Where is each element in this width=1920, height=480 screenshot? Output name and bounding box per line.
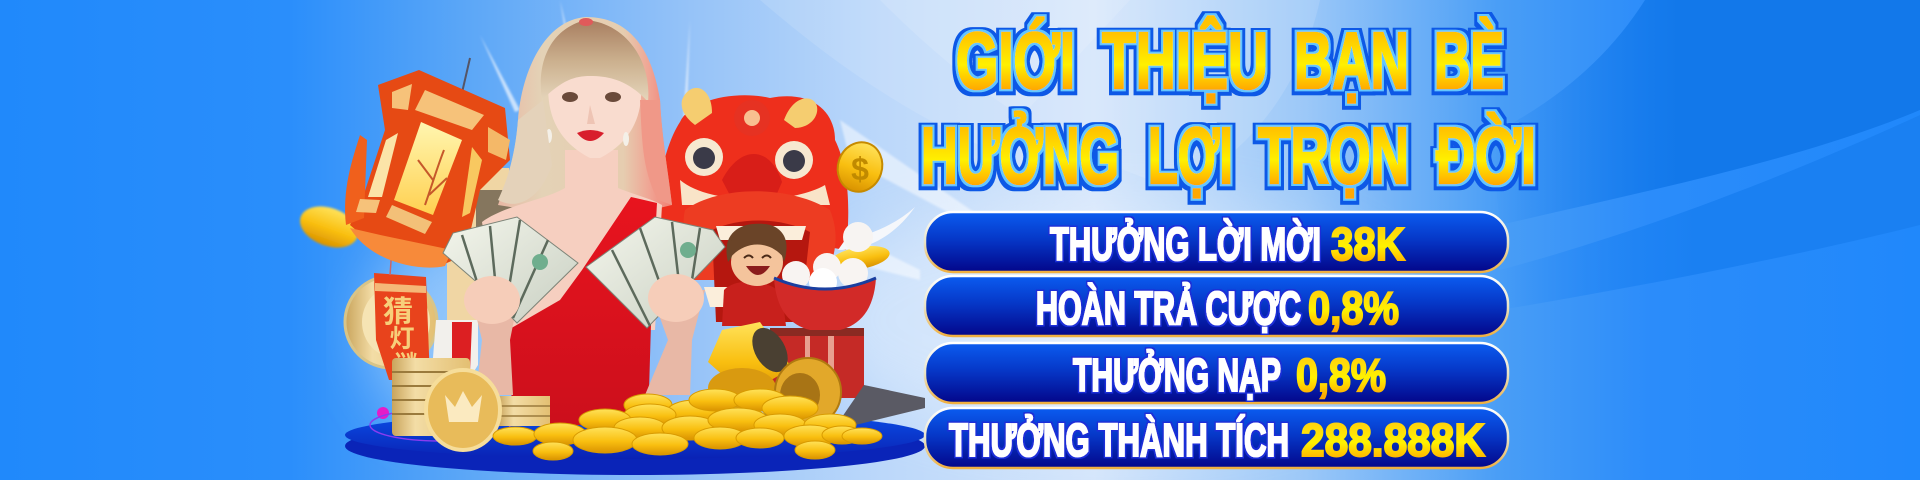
title line 2	[921, 111, 1536, 200]
lion horns	[682, 88, 712, 125]
coin with dollar sign	[831, 136, 889, 198]
eyes, nose and lips	[562, 92, 578, 102]
bar: bet rebate: HOÀN TRẢ CƯỢC	[1036, 282, 1301, 334]
bar: invite reward	[925, 212, 1508, 272]
spoon with rice ball	[829, 207, 915, 274]
lion dance head	[659, 88, 848, 322]
title line 1	[956, 16, 1504, 105]
title line 2: TRỌN	[1258, 111, 1409, 200]
gold coin stacks and crown coin	[392, 358, 550, 450]
bar: bet rebate	[925, 276, 1508, 336]
red dress	[508, 197, 657, 425]
golden pot spilling coins	[708, 322, 841, 426]
title line 1: BẠN	[1294, 16, 1409, 105]
hands	[464, 276, 520, 324]
title line 2: LỢI	[1148, 111, 1233, 200]
pile of gold coins	[493, 389, 882, 460]
paper lantern	[345, 58, 510, 268]
title line 2: ĐỜI	[1436, 111, 1536, 200]
red drum	[770, 328, 864, 398]
title line 1: THIỆU	[1102, 16, 1268, 105]
bar: invite reward: THƯỞNG LỜI MỜI	[1050, 218, 1321, 270]
bar: achievement reward: THƯỞNG THÀNH TÍCH	[949, 414, 1289, 466]
title line 1: GIỚI	[956, 16, 1075, 105]
big coin with red banner: 灯	[389, 319, 415, 355]
money fans	[443, 217, 725, 328]
face	[548, 64, 641, 158]
laughing boy	[722, 224, 787, 326]
laptop	[835, 385, 925, 430]
hair back	[498, 17, 672, 215]
arms	[470, 290, 520, 395]
bar: bet rebate: 0,8%	[1308, 282, 1399, 334]
bar: deposit reward: 0,8%	[1296, 349, 1386, 401]
illustration: festive promo scene	[294, 17, 925, 475]
bar: deposit reward: THƯỞNG NẠP	[1073, 349, 1281, 401]
blue round platform	[345, 407, 925, 475]
big coin with red banner: 猜	[383, 287, 413, 331]
title line 1: BÈ	[1434, 16, 1504, 105]
flying gold coin left	[294, 199, 364, 255]
big coin with red banner	[345, 248, 437, 380]
neck and shoulders	[482, 150, 662, 330]
bar: invite reward: 38K	[1331, 218, 1405, 270]
title line 2: HƯỞNG	[921, 111, 1119, 200]
title	[921, 16, 1536, 200]
bowl of rice balls	[774, 253, 876, 330]
woman	[443, 17, 725, 425]
coin with dollar sign: $	[851, 151, 869, 187]
gift box behind woman	[432, 168, 516, 400]
bar: achievement reward: 288.888K	[1301, 414, 1485, 466]
bangs and hair roots	[541, 20, 648, 102]
big coin with red banner: 谜	[394, 344, 418, 379]
front hair strands	[498, 100, 552, 204]
bar: deposit reward	[925, 343, 1508, 403]
